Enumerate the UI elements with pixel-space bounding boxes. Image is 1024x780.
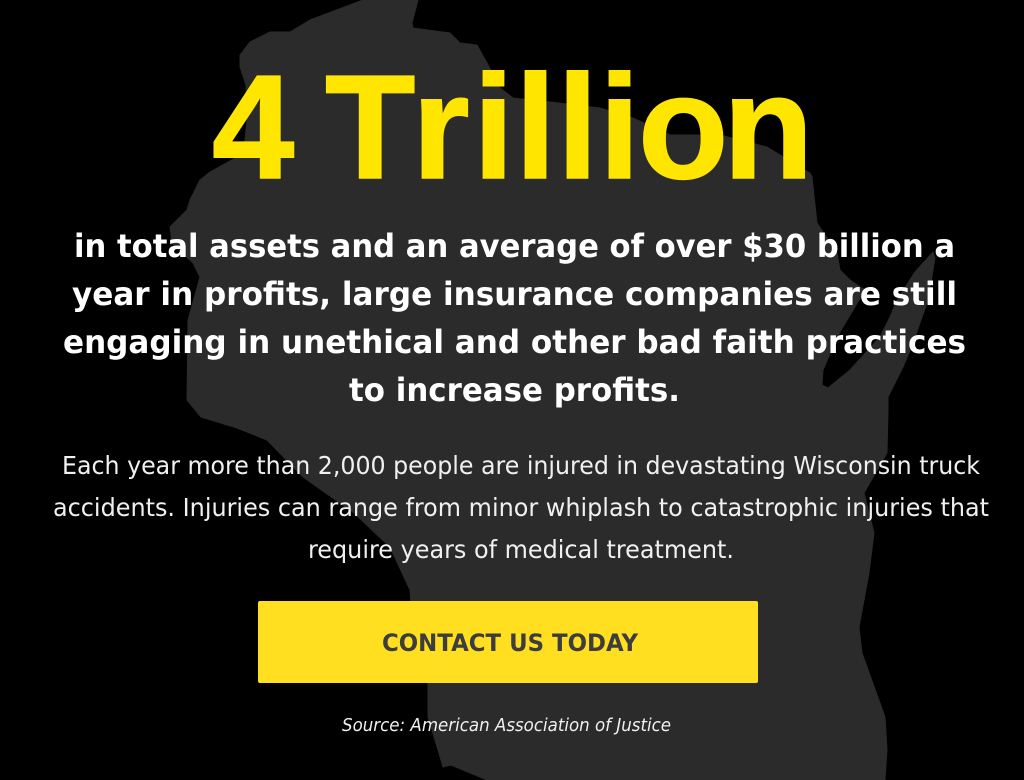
body text block: require years of medical treatment.	[308, 535, 734, 564]
body text block: Each year more than 2,000 people are injured in devastating Wisconsin truck	[62, 451, 981, 480]
title: 4 Trillion	[212, 45, 813, 210]
subheading text block: in total assets and an average of over $30 billion a	[74, 227, 955, 265]
subheading text block: year in profits, large insurance companies are still	[72, 275, 957, 313]
Wisconsin state silhouette	[170, 0, 935, 780]
subheading text block: engaging in unethical and other bad faith practices	[63, 323, 966, 361]
contact button: CONTACT US TODAY	[382, 629, 639, 657]
contact button	[258, 601, 758, 683]
subheading text block: to increase profits.	[349, 371, 680, 409]
body text block	[53, 451, 989, 564]
subheading text block	[63, 227, 966, 409]
source citation: Source: American Association of Justice	[342, 715, 671, 736]
body text block: accidents. Injuries can range from minor whiplash to catastrophic injuries that	[53, 493, 989, 522]
